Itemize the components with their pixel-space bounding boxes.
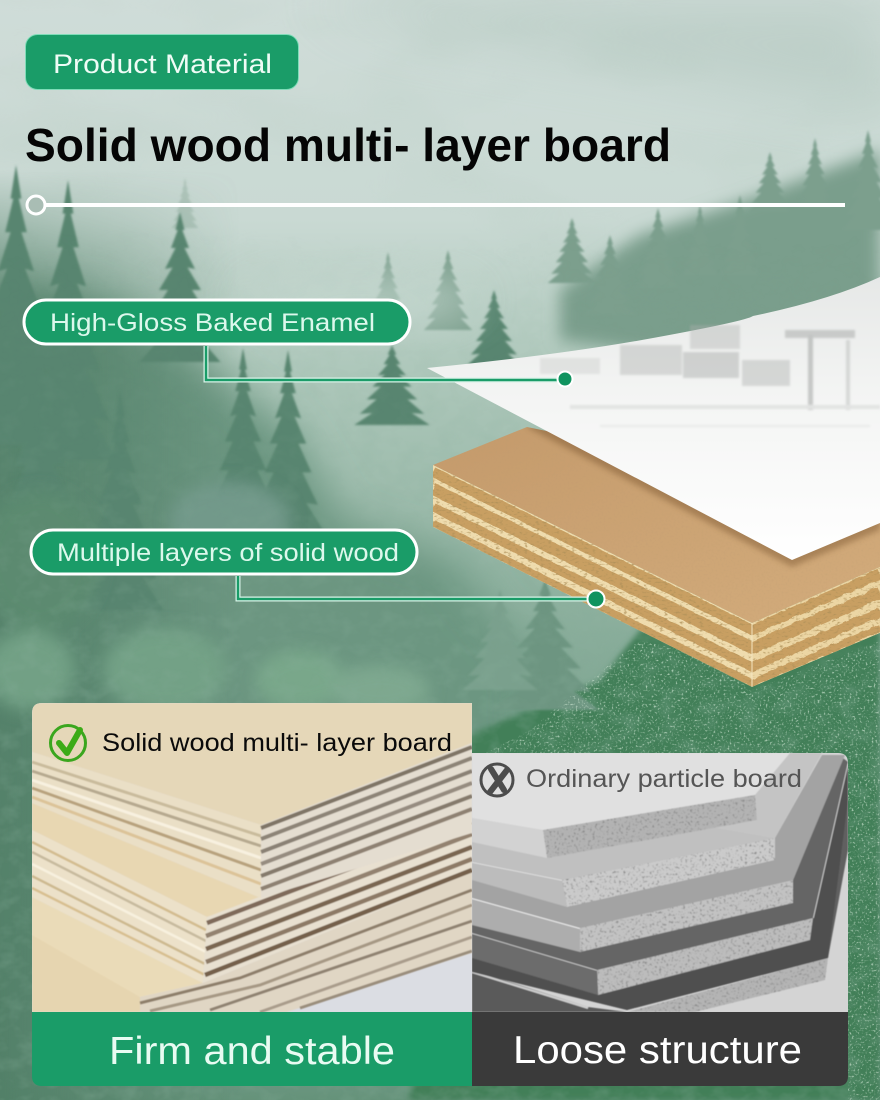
board 1 — [472, 753, 790, 830]
caption bar: loose structure — [472, 1012, 848, 1086]
enamel sheet — [427, 277, 880, 560]
caption: firm and stable: Firm and stable — [109, 1030, 395, 1073]
caption: loose structure: Loose structure — [513, 1029, 802, 1072]
left dark forest wash — [0, 170, 240, 1100]
middle board — [32, 803, 261, 917]
board side faces with plies — [433, 420, 880, 687]
caption bar: firm and stable — [32, 1012, 472, 1086]
top board — [32, 703, 472, 825]
panel: solid wood comparison — [32, 703, 472, 1086]
badge: Product Material: Product Material — [53, 49, 272, 79]
title rule with ring marker — [27, 196, 845, 214]
board 5 — [472, 970, 627, 1012]
check icon — [50, 726, 86, 760]
faint room reflection — [540, 325, 880, 427]
sheet shadow on board — [527, 420, 880, 567]
photo: stacked particle board — [472, 753, 848, 1086]
photo: stacked plywood — [32, 703, 472, 1086]
x icon — [481, 764, 513, 796]
card heading: solid wood: Solid wood multi- layer board — [102, 729, 452, 757]
label: Multiple layers of solid wood: Multiple layers of solid wood — [57, 539, 399, 567]
illustration: layered board with enamel sheet — [427, 277, 880, 687]
label: High-Gloss Baked Enamel: High-Gloss Baked Enamel — [50, 309, 375, 337]
broadleaf canopy — [0, 482, 430, 715]
distant fir trees — [172, 130, 880, 330]
connector: wood label to board — [238, 576, 604, 608]
near fir trees — [0, 165, 599, 710]
particle chip texture — [543, 795, 828, 1012]
bottom board — [32, 703, 472, 1012]
label: High-Gloss Baked Enamel — [24, 300, 410, 344]
badge: Product Material — [26, 34, 298, 90]
connector: enamel label to sheet — [206, 346, 572, 386]
panel: particle board comparison — [472, 753, 848, 1086]
label: Multiple layers of solid wood — [31, 530, 417, 574]
board 4 — [472, 762, 848, 1010]
board 2 — [472, 755, 845, 928]
board 3 — [472, 758, 848, 970]
card heading: particle board: Ordinary particle board — [526, 765, 802, 793]
title: Solid wood multi- layer board — [25, 119, 671, 171]
board top face — [433, 427, 880, 623]
